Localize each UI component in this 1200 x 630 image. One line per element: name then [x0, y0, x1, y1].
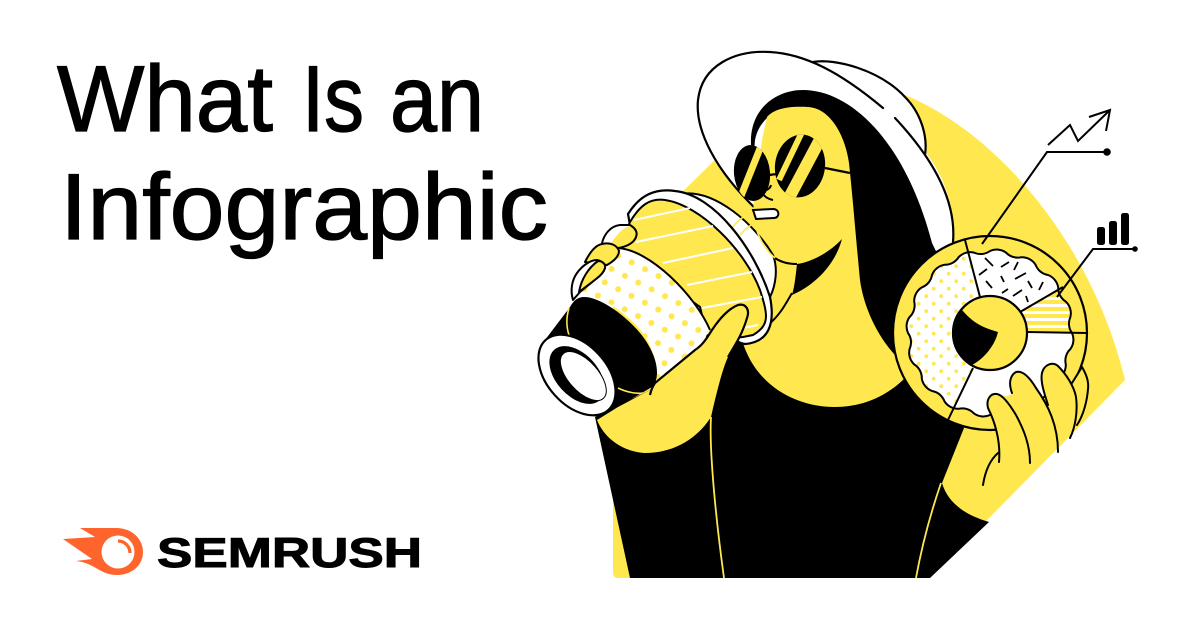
- back finger: [1072, 367, 1088, 425]
- hair: [751, 90, 960, 378]
- palm and finger fill: [987, 364, 1077, 470]
- cup dotted band: [575, 248, 710, 385]
- cup lid dome: [680, 193, 776, 297]
- face and neck: [742, 107, 905, 407]
- sleeve highlight lines: [567, 308, 643, 393]
- fingers holding the cup: [572, 225, 637, 300]
- title: an: [390, 46, 484, 151]
- right hand with fingers: [983, 364, 1088, 485]
- straw and lips: [753, 209, 778, 219]
- black top and torso: [595, 340, 989, 578]
- nose: [762, 185, 773, 200]
- title: What: [57, 46, 273, 151]
- trend arrow callout: [982, 110, 1110, 244]
- illustration: woman drinking from a cup: [523, 52, 989, 578]
- title: Infographic: [60, 154, 548, 259]
- donut: [907, 250, 1073, 416]
- logo: Semrush: SEMRUSH: [157, 529, 422, 576]
- cup bottom ring: [523, 320, 631, 430]
- finger outlines: [983, 364, 1077, 485]
- illustration: yellow background shape: [613, 83, 1125, 578]
- cup black sleeve: [545, 297, 657, 416]
- dotted slice: [909, 256, 978, 403]
- plate: [893, 236, 1087, 430]
- chin and hair crescent: [792, 239, 842, 295]
- thumb outline: [650, 305, 748, 395]
- hat: [698, 52, 953, 300]
- centre black wedge: [954, 310, 998, 365]
- torso seam lines: [711, 417, 941, 578]
- cup body with stripes: [618, 200, 766, 340]
- striped slice: [1023, 291, 1070, 332]
- sprinkles: [979, 258, 1043, 302]
- wavy edge: [907, 250, 1073, 416]
- bar chart callout: [1057, 213, 1138, 297]
- title: [57, 46, 548, 259]
- slice dividers: [948, 240, 1087, 420]
- cup rim: [628, 190, 772, 344]
- logo: Semrush: [63, 528, 422, 576]
- chin line: [768, 258, 797, 325]
- title: Is: [302, 46, 364, 151]
- arm and thumb: [597, 305, 748, 453]
- lid detail lines: [733, 213, 775, 258]
- donut pie chart: [880, 236, 1087, 430]
- sunglasses: [732, 130, 850, 202]
- white hat wedge beside the face: [754, 118, 767, 152]
- donut centre: [953, 296, 1027, 370]
